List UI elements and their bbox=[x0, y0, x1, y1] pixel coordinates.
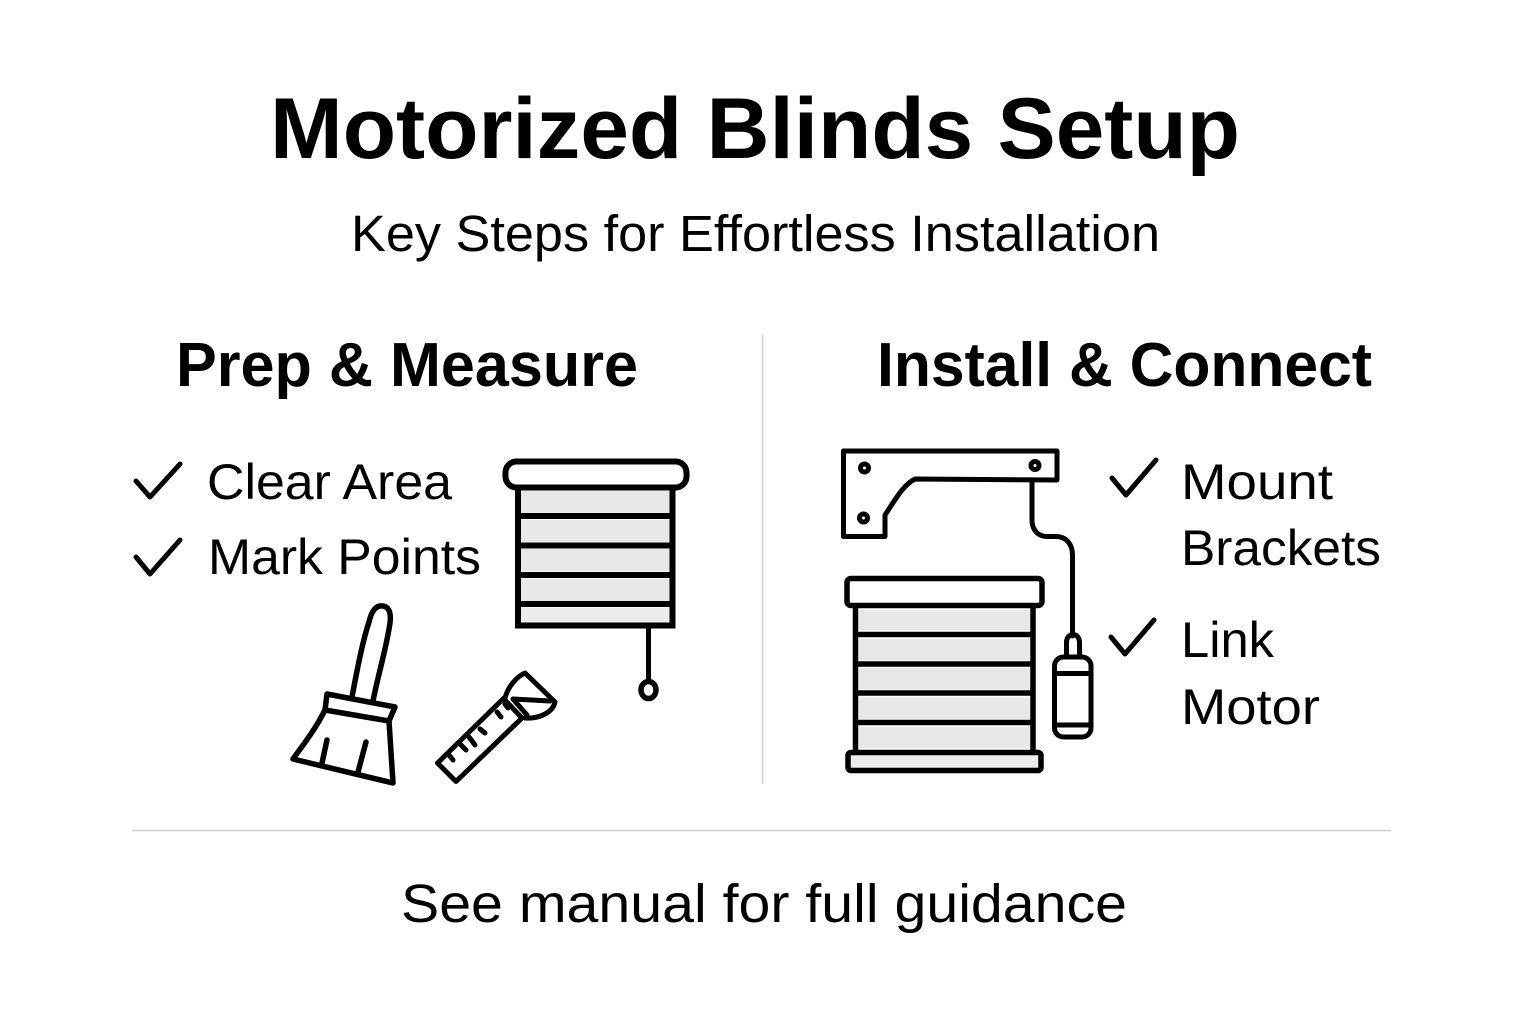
icon: motor bbox=[1054, 634, 1091, 737]
subtitle: Key Steps for Effortless Installation bbox=[351, 205, 1160, 262]
icon: check link motor bbox=[1111, 620, 1154, 654]
checklist: prep bbox=[136, 454, 481, 585]
title: Motorized Blinds Setup bbox=[270, 81, 1240, 177]
checklist: install bbox=[1111, 454, 1381, 735]
icon: roller blind bbox=[506, 462, 686, 698]
icon: motor cable bbox=[1032, 480, 1072, 636]
heading: Install & Connect: Install & Connect bbox=[877, 331, 1372, 400]
text: link motor: Link bbox=[1181, 612, 1275, 668]
icon: check mark points bbox=[136, 540, 180, 574]
icon: broom bbox=[293, 606, 395, 783]
icon: installed blind bbox=[847, 578, 1042, 770]
text: mark points: Mark Points bbox=[208, 529, 481, 585]
text: mount brackets: Mount bbox=[1181, 454, 1333, 510]
heading: Prep & Measure: Prep & Measure bbox=[176, 331, 638, 400]
text: link motor: Motor bbox=[1181, 679, 1320, 735]
icon: check mount brackets bbox=[1112, 460, 1156, 495]
footer note: See manual for full guidance bbox=[401, 874, 1127, 934]
text: clear area: Clear Area bbox=[207, 454, 452, 510]
icon: tape measure bbox=[438, 673, 555, 782]
icon: check clear area bbox=[136, 464, 180, 497]
text: mount brackets: Brackets bbox=[1181, 520, 1381, 576]
icon: bracket bbox=[844, 451, 1057, 536]
